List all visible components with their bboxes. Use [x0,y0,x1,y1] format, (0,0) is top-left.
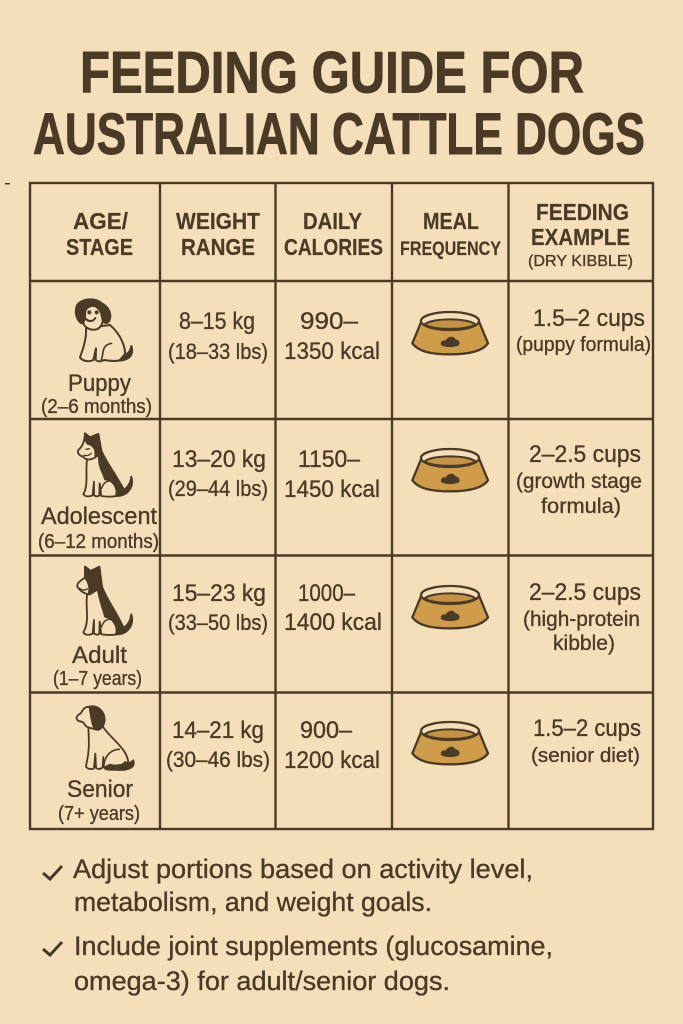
header row: MEAL [423,208,479,234]
row: adult [53,567,641,690]
header row: FREQUENCY [400,239,501,260]
row: adult: Adult [72,642,127,669]
header row: STAGE [66,234,133,260]
row: senior [58,706,641,825]
row: adult: 15–23 kg [172,580,266,607]
header row: CALORIES [284,234,383,260]
icon: food bowl [412,449,488,491]
row: adult: (1–7 years) [53,668,142,690]
note: joint supplements [43,931,553,996]
feeding table [30,183,653,829]
row: adolescent: formula) [541,495,621,518]
row: puppy: (2–6 months) [41,396,152,418]
note: adjust portions: Adjust portions based on activity level, [73,854,533,884]
note: adjust portions [43,854,533,917]
header row: (DRY KIBBLE) [528,253,633,270]
icon: food bowl [412,722,488,764]
header row: FEEDING [536,199,629,225]
row: adolescent: (6–12 months) [38,531,159,553]
row: adolescent: 1450 kcal [284,476,380,503]
row: puppy: (18–33 lbs) [168,339,268,364]
title: FEEDING GUIDE FOR [80,40,584,106]
row: senior: 14–21 kg [172,717,264,744]
row: adolescent: 2–2.5 cups [529,441,641,468]
row: senior: Senior [67,776,133,803]
icon: check mark [43,942,62,955]
note: joint supplements: Include joint supplements (glucosamine, [74,931,553,961]
row: puppy: 8–15 kg [179,308,255,335]
row: adolescent: (growth stage [516,470,642,493]
row: puppy: (puppy formula) [516,334,651,356]
title [33,40,645,167]
icon: food bowl [412,312,488,354]
row: senior: (30–46 lbs) [166,747,270,772]
row: adult: (33–50 lbs) [168,610,268,635]
note: adjust portions: metabolism, and weight goals. [74,887,432,917]
row: adolescent: 1150– [298,446,361,473]
table grid [30,183,653,829]
row: puppy [41,299,651,418]
icon: adolescent dog [78,433,132,497]
header row [66,199,633,270]
icon: adult dog [77,567,132,635]
header row: EXAMPLE [531,224,630,250]
header row: DAILY [303,208,362,234]
row: adult: 2–2.5 cups [529,579,641,606]
header row: WEIGHT [176,208,260,234]
row: adolescent: Adolescent [41,503,157,530]
row: adolescent: 13–20 kg [172,446,266,473]
icon: puppy [76,299,132,361]
row: adult: (high-protein [523,608,640,631]
row: senior: (senior diet) [531,745,640,767]
row: senior: 900– [300,717,353,744]
header row: RANGE [181,234,255,260]
row: adolescent: (29–44 lbs) [168,476,268,501]
icon: senior dog [77,706,134,770]
row: puppy: 1.5–2 cups [533,305,645,332]
row: puppy: Puppy [68,370,131,397]
row: adolescent [38,433,642,553]
note: joint supplements: omega-3) for adult/senior dogs. [74,966,450,996]
row: puppy: 990– [300,308,359,335]
row: adult: kibble) [553,632,615,655]
row: senior: 1200 kcal [284,747,380,774]
header row: AGE/ [73,208,129,234]
row: senior: 1.5–2 cups [533,715,641,742]
row: puppy: 1350 kcal [284,338,380,365]
row: adult: 1000– [298,580,356,607]
icon: food bowl [412,586,488,628]
icon: check mark [43,866,62,879]
row: senior: (7+ years) [58,803,140,825]
row: adult: 1400 kcal [284,609,382,636]
